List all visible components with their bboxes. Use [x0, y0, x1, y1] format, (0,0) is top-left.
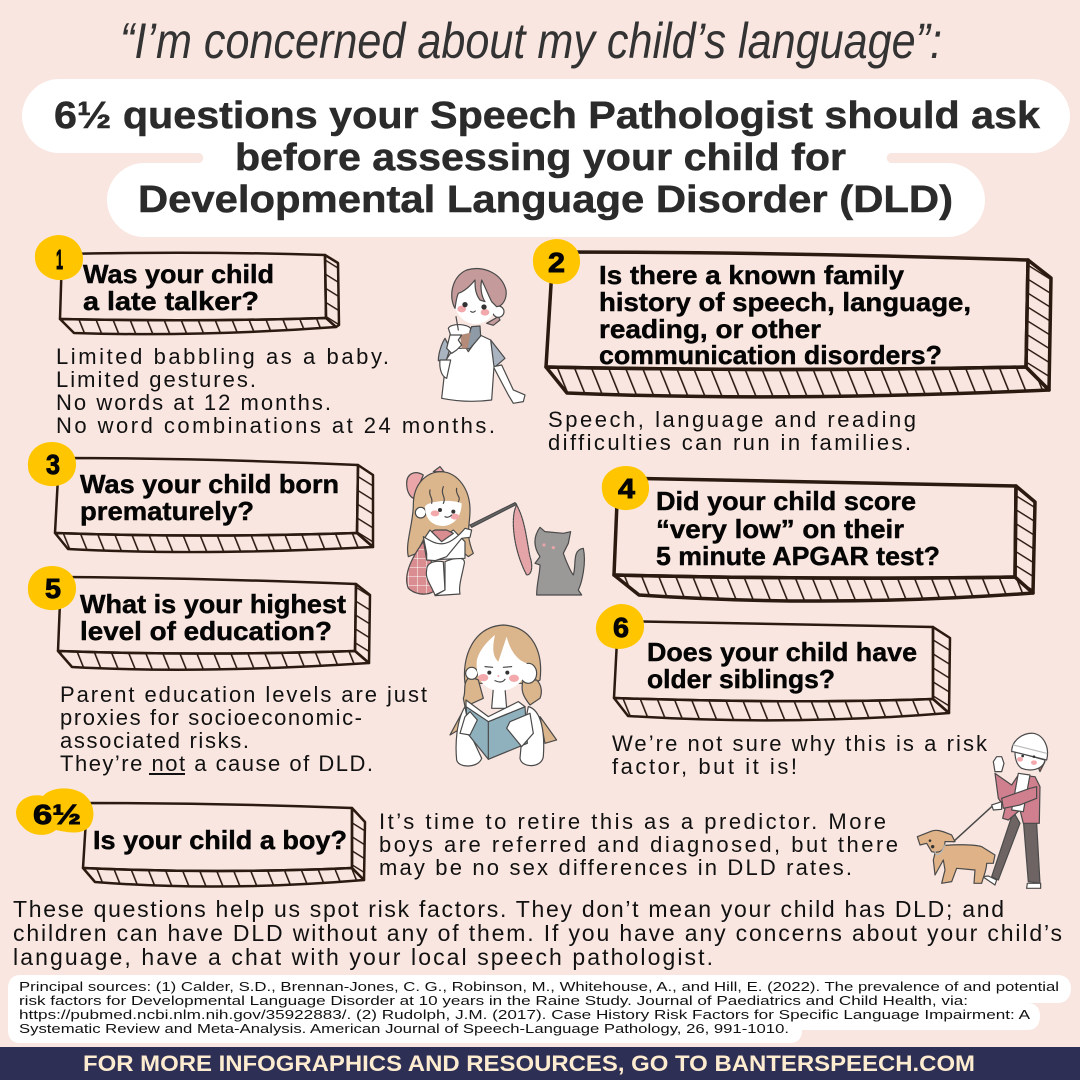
panel: question 2 [533, 239, 1051, 455]
question 3 text: prematurely? [80, 496, 254, 526]
question 6 text: Does your child have [647, 637, 917, 667]
question 2 text: Is there a known family [599, 260, 905, 290]
heading text: before assessing your child for [235, 137, 846, 179]
question 5 text: level of education? [80, 616, 332, 646]
panel: question 1 [35, 235, 495, 438]
question 5 text [80, 589, 346, 646]
answer 6.5 text: may be no sex differences in DLD rates. [379, 855, 852, 880]
footer banner [0, 1047, 1080, 1080]
heading panel [22, 79, 1070, 237]
footer text: FOR MORE INFOGRAPHICS AND RESOURCES, GO TO BANTERSPEECH.COM [83, 1051, 975, 1076]
answer 1 text: Limited babbling as a baby. [56, 344, 389, 369]
answer 5 text: Parent education levels are just [60, 682, 427, 707]
answer 5 text: proxies for socioeconomic- [60, 705, 362, 730]
heading text [54, 95, 1041, 221]
heading text: 6½ questions your Speech Pathologist should ask [54, 95, 1041, 137]
closing paragraph: These questions help us spot risk factors. They don’t mean your child has DLD; and [13, 896, 1004, 922]
answer 6.5 text [379, 809, 898, 880]
box 6 [614, 621, 950, 720]
panel: question 6 and a half [16, 788, 898, 887]
badge 2: 2 [548, 247, 565, 278]
answer 6 text [612, 731, 988, 779]
question 1 text: Was your child [83, 259, 274, 289]
badge 5: 5 [45, 573, 61, 604]
question 5 text: What is your highest [80, 589, 346, 619]
question 4 text [656, 486, 940, 571]
illustration: girl reading book [450, 625, 557, 766]
sources text: risk factors for Developmental Language Disorder at 10 years in the Raine Study. Journal of Paediatrics and Child Health, via: [19, 993, 968, 1008]
sources panel [8, 975, 1071, 1043]
box 4 [614, 478, 1035, 601]
answer 1 text [56, 344, 495, 438]
panel: question 5 [28, 566, 427, 776]
question 3 text [80, 469, 339, 526]
badge 6.5: 6½ [33, 799, 81, 830]
question 4 text: “very low” on their [656, 514, 904, 544]
closing paragraph [13, 896, 1062, 970]
badge 1 [35, 235, 83, 280]
question 4 text: Did your child score [656, 486, 916, 516]
answer 2 text [548, 407, 916, 455]
answer 5 text: They’re not a cause of DLD. [60, 751, 373, 776]
badge 3 [28, 442, 76, 486]
closing paragraph: language, have a chat with your local speech pathologist. [13, 944, 713, 970]
answer 1 text: No words at 12 months. [56, 390, 331, 415]
heading text: Developmental Language Disorder (DLD) [138, 179, 953, 221]
illustration: girl playing with cat [407, 467, 584, 596]
answer 5 text [60, 682, 427, 776]
box 3 [55, 458, 373, 552]
illustration: person walking dog [917, 733, 1048, 888]
question 1 text [83, 259, 274, 316]
badge 6 [596, 604, 644, 649]
answer 6 text: We’re not sure why this is a risk [612, 731, 988, 756]
answer 2 text: Speech, language and reading [548, 407, 916, 432]
badge 3: 3 [46, 449, 60, 480]
badge 6: 6 [613, 612, 629, 643]
sources text: Systematic Review and Meta-Analysis. American Journal of Speech-Language Pathology, 26, 991-1010. [19, 1021, 789, 1036]
question 2 text: reading, or other [599, 314, 821, 344]
question 4 text: 5 minute APGAR test? [656, 541, 940, 571]
sources text: https://pubmed.ncbi.nlm.nih.gov/35922883/. (2) Rudolph, J.M. (2017). Case History Risk Factors for Specific Language Impairment: A [19, 1007, 1030, 1022]
heading background pill [22, 79, 1070, 237]
question 1 text: a late talker? [83, 286, 259, 316]
answer 1 text: Limited gestures. [56, 367, 256, 392]
question 6 text [647, 637, 917, 694]
sources text: Principal sources: (1) Calder, S.D., Brennan-Jones, C. G., Robinson, M., Whitehouse, A., and Hill, E. (2022). The prevalence of and potential [19, 979, 1059, 994]
sources background [8, 975, 1071, 1043]
question 2 text: communication disorders? [599, 340, 942, 370]
question 6 text: older siblings? [647, 664, 835, 694]
box 5 [58, 577, 370, 670]
title: “I’m concerned about my child’s language”: [120, 13, 942, 69]
answer 6.5 text: It’s time to retire this as a predictor. More [379, 809, 886, 834]
answer 1 text: No word combinations at 24 months. [56, 413, 495, 438]
answer 5 text: associated risks. [60, 728, 249, 753]
question 6.5 text: Is your child a boy? [93, 825, 347, 855]
answer 2 text: difficulties can run in families. [548, 430, 911, 455]
closing paragraph: children can have DLD without any of them. If you have any concerns about your child’s [13, 920, 1062, 946]
badge 6.5 [16, 788, 93, 835]
panel: question 4 [602, 466, 1035, 601]
badge 5 [28, 566, 76, 610]
question 2 text [599, 260, 971, 370]
answer 6 text: factor, but it is! [612, 754, 797, 779]
badge 4: 4 [618, 473, 635, 504]
badge 2 [533, 239, 580, 284]
panel: question 6 [596, 604, 988, 779]
question 3 text: Was your child born [80, 469, 339, 499]
panel: question 3 [28, 442, 373, 552]
badge 1: 1 [56, 244, 63, 275]
answer 6.5 text: boys are referred and diagnosed, but there [379, 832, 898, 857]
illustration: girl with drink [438, 269, 525, 403]
question 2 text: history of speech, language, [599, 287, 971, 317]
box 6.5 [83, 803, 365, 887]
sources text [19, 979, 1059, 1036]
box 2 [546, 252, 1051, 397]
badge 4 [602, 466, 649, 510]
box 1 [60, 253, 339, 334]
